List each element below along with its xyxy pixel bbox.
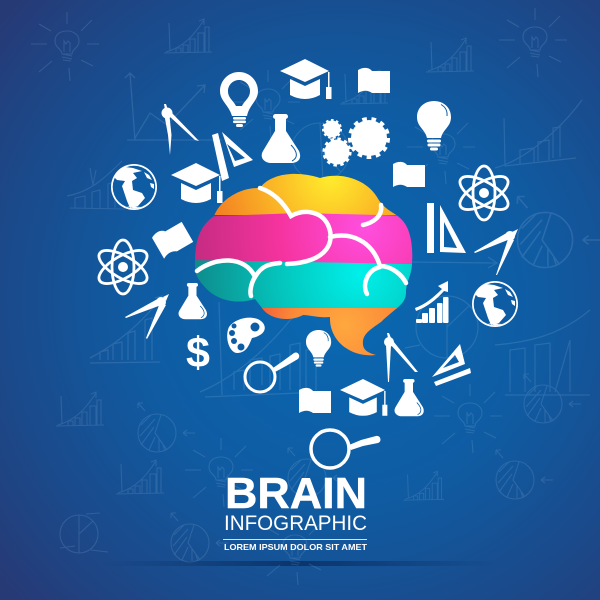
icon: book bottom [299,388,331,413]
icon: graduation cap top [280,59,332,99]
icon: graduation cap left [171,163,222,203]
icon: paint palette [227,318,265,353]
floor shadow band [100,561,500,566]
icon: globe right [472,281,518,327]
subtitle: INFOGRAPHIC [224,512,367,535]
icon: atom right [455,166,513,220]
icon: atom left [94,240,152,294]
icon: compass left [125,294,169,339]
icon: flask left [179,283,207,319]
icon: set square and ruler right [427,203,466,253]
brain [194,174,412,356]
icon: lightbulb small [306,330,331,367]
icon: flask bottom [395,379,424,416]
icon: book right [393,162,425,187]
divider line [223,539,367,540]
icon: bar chart with arrow [415,281,448,323]
icon: graduation cap bottom [340,379,387,416]
title: BRAIN [225,469,367,518]
icon: book top [358,68,390,93]
icon: lightbulb outline [220,72,258,127]
icon: compass bottom right [384,333,418,382]
icon: book left [151,219,193,259]
icon: gears [323,119,388,165]
icon: magnifier large [311,430,380,468]
brain fold lines [197,188,406,296]
icon: globe left [111,164,157,210]
icon: set square and ruler bottom right [432,344,471,386]
icon: compass top left [162,104,199,155]
brain colour bands [195,174,412,356]
icon: flask top [262,114,300,163]
icon: set square and ruler top left [212,132,253,181]
icon: compass right [474,229,518,275]
icon: dollar sign: $ [186,329,210,377]
icon: lightbulb solid right [417,101,451,150]
icon: magnifier small [245,353,299,392]
tagline: LOREM IPSUM DOLOR SIT AMET [224,542,368,552]
